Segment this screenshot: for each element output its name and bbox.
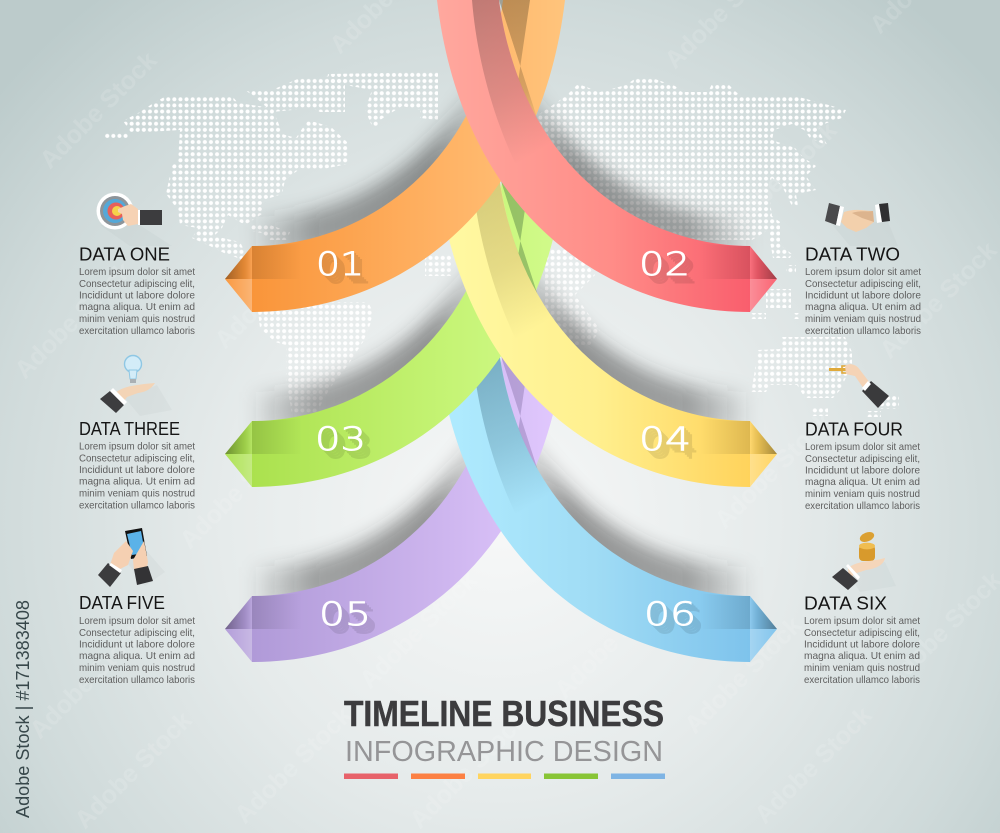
text block: data three <box>79 419 195 512</box>
text block: data six: Lorem ipsum dolor sit amet <box>804 616 920 627</box>
text block: data two: magna aliqua. Ut enim ad <box>805 302 921 313</box>
Eurasia <box>538 78 846 258</box>
text block: data four <box>805 420 920 512</box>
text block: data six: DATA SIX <box>804 594 887 614</box>
text block: data three: minim veniam quis nostrud <box>79 488 195 500</box>
text block: data two: exercitation ullamco laboris <box>805 326 921 337</box>
text block: data four: exercitation ullamco laboris <box>805 501 920 512</box>
text block: data four: magna aliqua. Ut enim ad <box>805 477 920 488</box>
icon: target and hand <box>96 192 172 246</box>
icon: key and hand <box>829 364 889 408</box>
text block: data one: minim veniam quis nostrud <box>79 314 195 325</box>
Africa west <box>425 255 452 276</box>
text block: data six: minim veniam quis nostrud <box>804 663 920 674</box>
number 01: 01 <box>316 245 364 283</box>
dotted world map <box>105 72 899 417</box>
text block: data six <box>804 594 920 686</box>
Indonesia islands <box>751 265 799 319</box>
number 02: 02 <box>639 245 690 283</box>
text block: data three: Lorem ipsum dolor sit amet <box>79 442 195 452</box>
number 04: 04 <box>639 420 691 458</box>
ribbon 01 orange <box>225 0 565 312</box>
ribbon 04 yellow <box>437 175 777 487</box>
Central America islands <box>250 225 290 240</box>
text block: data five: exercitation ullamco laboris <box>79 675 195 686</box>
icon: coins and hand <box>832 530 896 592</box>
watermark: Adobe Stock <box>174 426 302 554</box>
vertical stock credit: Adobe Stock | #171383408 <box>13 600 33 818</box>
South America <box>257 302 373 414</box>
Greenland <box>326 72 438 126</box>
ribbon 03 green <box>225 175 565 487</box>
text block: data six: exercitation ullamco laboris <box>804 675 920 686</box>
title: TIMELINE BUSINESS <box>344 693 664 734</box>
number 03: 03 <box>315 420 366 458</box>
watermark: Adobe Stock <box>229 701 357 829</box>
text block: data three: Consectetur adipiscing elit, <box>79 454 195 464</box>
watermark: Adobe Stock <box>709 406 837 534</box>
text block: data five: Lorem ipsum dolor sit amet <box>79 616 195 627</box>
watermark: Adobe Stock <box>679 611 807 739</box>
ribbon 05 purple <box>225 350 565 662</box>
number 05: 05 <box>319 595 371 633</box>
watermark: Adobe Stock <box>34 46 162 174</box>
text block: data five: Incididunt ut labore dolore <box>79 640 195 650</box>
ribbon shadows <box>255 100 747 588</box>
text block: data one: Consectetur adipiscing elit, <box>79 279 195 290</box>
text block: data one: Incididunt ut labore dolore <box>79 290 195 302</box>
icon: light bulb and hand <box>100 356 172 416</box>
text block: data four: Lorem ipsum dolor sit amet <box>805 442 920 453</box>
text block: data two: Lorem ipsum dolor sit amet <box>805 267 921 278</box>
text block: data one: Lorem ipsum dolor sit amet <box>79 267 195 278</box>
ribbon 06 blue <box>437 350 777 662</box>
watermark: Adobe Stock <box>209 226 337 354</box>
watermark: Adobe Stock <box>9 256 137 384</box>
colour bars <box>344 774 665 779</box>
number 06: 06 <box>644 595 696 633</box>
text block: data four: Consectetur adipiscing elit, <box>805 454 920 465</box>
watermark: Adobe Stock <box>549 576 677 704</box>
watermark: Adobe Stock <box>354 566 482 694</box>
text block: data two <box>805 244 921 337</box>
text block: data four: Incididunt ut labore dolore <box>805 466 920 476</box>
watermark: Adobe Stock <box>714 116 842 244</box>
text block: data three: Incididunt ut labore dolore <box>79 465 195 476</box>
text block: data two: Incididunt ut labore dolore <box>805 290 921 302</box>
text block: data four: minim veniam quis nostrud <box>805 489 920 500</box>
text block: data six: Consectetur adipiscing elit, <box>804 628 920 639</box>
text block: data three: magna aliqua. Ut enim ad <box>79 476 195 488</box>
text block: data six: magna aliqua. Ut enim ad <box>804 651 920 662</box>
text block: data five: DATA FIVE <box>79 593 165 613</box>
text block: data two: minim veniam quis nostrud <box>805 314 921 325</box>
text block: data one: magna aliqua. Ut enim ad <box>79 302 195 313</box>
text block: data two: Consectetur adipiscing elit, <box>805 279 921 290</box>
text block: data one <box>79 244 195 337</box>
Australia <box>750 337 852 398</box>
North America <box>105 96 348 262</box>
text block: data three: DATA THREE <box>79 419 180 439</box>
watermark: Adobe Stock <box>69 706 197 833</box>
text block: data one: DATA ONE <box>79 244 170 264</box>
ribbon 02 pink <box>437 0 777 312</box>
watermark: Adobe Stock <box>874 236 1000 364</box>
watermark: Adobe Stock <box>749 701 877 829</box>
text block: data five: magna aliqua. Ut enim ad <box>79 651 195 662</box>
text block: data five <box>79 593 195 686</box>
text block: data four: DATA FOUR <box>805 420 903 440</box>
text block: data one: exercitation ullamco laboris <box>79 326 195 337</box>
watermark: Adobe Stock <box>404 706 532 833</box>
subtitle: INFOGRAPHIC DESIGN <box>345 736 663 768</box>
Africa east <box>545 248 600 345</box>
icon: handshake <box>825 203 898 246</box>
text block: data five: minim veniam quis nostrud <box>79 663 195 674</box>
Pacific islands <box>812 395 899 417</box>
text block: data two: DATA TWO <box>805 244 900 264</box>
text block: data five: Consectetur adipiscing elit, <box>79 628 195 639</box>
icon: phone and hands <box>98 528 165 587</box>
watermark: Adobe Stock <box>24 616 152 744</box>
Arctic islands <box>245 76 345 112</box>
text block: data six: Incididunt ut labore dolore <box>804 640 920 650</box>
text block: data three: exercitation ullamco laboris <box>79 500 195 512</box>
